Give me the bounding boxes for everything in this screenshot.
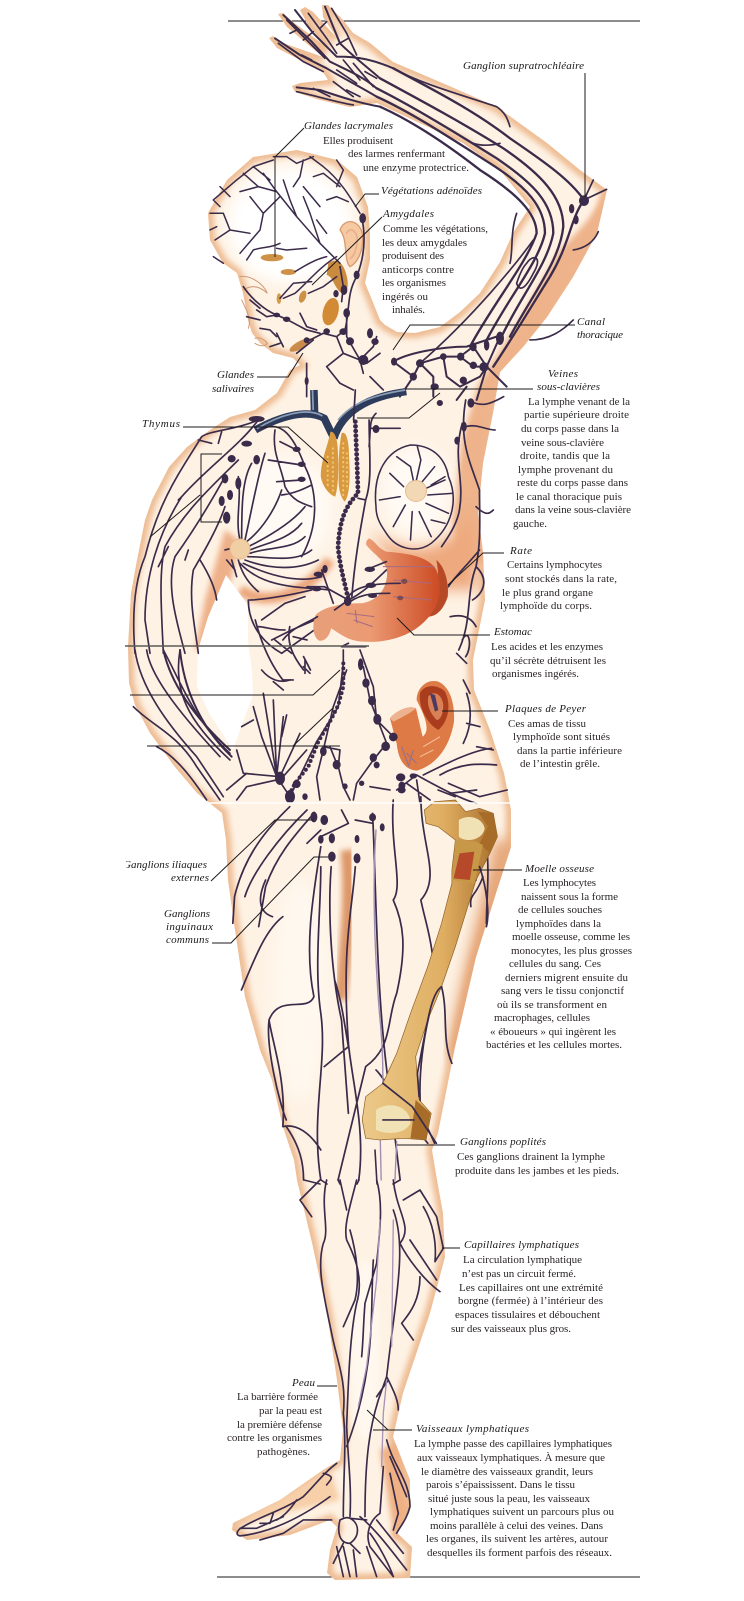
vessels: knee connectors: [304, 1150, 400, 1184]
label: Amygdales: produisent des: [382, 250, 444, 262]
label: Rate: le plus grand organe: [502, 587, 593, 599]
label: Estomac: Estomac: [493, 626, 532, 638]
label: Ganglions poplites: Ces ganglions drainent la lymphe: [457, 1151, 605, 1163]
label: Plaques de Peyer: Ces amas de tissu: [508, 718, 586, 730]
unlabelled leader lines left: [125, 454, 369, 746]
label: Vaisseaux lymphatiques: les organes, ils suivent les artères, autour: [426, 1533, 608, 1545]
label: Plaques de Peyer: lymphoïde sont situés: [513, 731, 610, 743]
label: Veines sous-clavieres: veine sous-clavière: [521, 437, 604, 449]
label: Amygdales: inhalés.: [392, 304, 425, 316]
label: Glandes lacrymales: des larmes renfermant: [348, 148, 445, 160]
label: Canal thoracique: [393, 316, 623, 350]
label: Veines sous-clavieres: le canal thoracique puis: [516, 491, 622, 503]
label: Amygdales: anticorps contre: [382, 264, 454, 276]
label: Vaisseaux lymphatiques: situé juste sous la peau, les vaisseaux: [428, 1493, 590, 1505]
label: Moelle osseuse: [473, 863, 632, 1051]
label: Veines sous-clavieres: partie supérieure droite: [524, 409, 629, 421]
subclavian veins: [255, 390, 406, 438]
label: Vaisseaux lymphatiques: Vaisseaux lymphatiques: [416, 1423, 529, 1435]
bottom rule: [217, 1576, 640, 1578]
label: Estomac: [397, 618, 606, 680]
label: Moelle osseuse: sang vers le tissu conjonctif: [501, 985, 624, 997]
label: Ganglions inguinaux communs: Ganglions: [164, 908, 210, 920]
label: Vaisseaux lymphatiques: aux vaisseaux lymphatiques. À mesure que: [417, 1452, 605, 1464]
label: Capillaires lymphatiques: sur des vaisseaux plus gros.: [451, 1323, 571, 1335]
gland: amygdala: [320, 296, 342, 327]
label: Ganglions iliaques externes: externes: [171, 872, 209, 884]
label: Plaques de Peyer: dans la partie inférieure: [517, 745, 622, 757]
label: Moelle osseuse: macrophages, cellules: [494, 1012, 590, 1024]
nipple right: [406, 480, 426, 502]
label: Estomac: qu’il sécrète détruisent les: [490, 655, 606, 667]
label: Moelle osseuse: Moelle osseuse: [524, 863, 594, 875]
label: Amygdales: Amygdales: [382, 208, 434, 220]
label: Thymus: [142, 418, 328, 463]
label: Thymus: Thymus: [142, 418, 180, 430]
gland: parotid: [327, 261, 348, 294]
gland: small cheek: [277, 293, 281, 304]
label: Capillaires lymphatiques: La circulation lymphatique: [463, 1254, 582, 1266]
vessels: axillary network: [391, 195, 589, 400]
label: Peau: [227, 1377, 337, 1458]
label: Estomac: Les acides et les enzymes: [491, 641, 603, 653]
femur: [362, 800, 497, 1143]
label: Vaisseaux lymphatiques: [367, 1410, 614, 1559]
label: Glandes lacrymales: une enzyme protectrice.: [363, 162, 469, 174]
vessels: head and neck: [210, 157, 383, 397]
label: Canal thoracique: Canal: [577, 316, 605, 328]
label: Peau: La barrière formée: [237, 1391, 318, 1403]
stomach: [313, 538, 440, 642]
gland: cheek: [297, 290, 308, 304]
face features: [240, 222, 363, 346]
nipple left: [230, 539, 250, 559]
label: Ganglion supratrochleaire: [463, 60, 585, 197]
label: Rate: Rate: [509, 545, 532, 557]
label: Capillaires lymphatiques: [442, 1239, 603, 1335]
label: Glandes lacrymales: [275, 120, 469, 257]
label: Capillaires lymphatiques: borgne (fermée) à l’intérieur des: [458, 1295, 603, 1307]
label: Capillaires lymphatiques: Capillaires lymphatiques: [464, 1239, 579, 1251]
label: Veines sous-clavieres: Veines: [548, 368, 578, 380]
label: Vaisseaux lymphatiques: parois s’épaississent. Dans le tissu: [426, 1479, 576, 1491]
label: Veines sous-clavieres: dans la veine sous-clavière: [515, 504, 631, 516]
label: Veines sous-clavieres: [357, 368, 631, 530]
label: Estomac: organismes ingérés.: [492, 668, 579, 680]
label: Glandes salivaires: [212, 353, 303, 395]
label: Veines sous-clavieres: lymphe provenant du: [518, 464, 614, 476]
label: Moelle osseuse: où ils se transforment en: [497, 999, 608, 1011]
label: Vegetations adenoides: Végétations adénoïdes: [381, 185, 482, 197]
label: Ganglions inguinaux communs: communs: [166, 934, 209, 946]
label: Plaques de Peyer: de l’intestin grêle.: [520, 758, 600, 770]
label: Veines sous-clavieres: La lymphe venant de la: [528, 396, 630, 408]
label: Amygdales: les organismes: [382, 277, 446, 289]
label: Glandes salivaires: Glandes: [217, 369, 254, 381]
label: Moelle osseuse: lymphoïdes dans la: [516, 918, 601, 930]
label: Vaisseaux lymphatiques: lymphatiques suivent un parcours plus ou: [430, 1506, 614, 1518]
label: Amygdales: ingérés ou: [382, 291, 428, 303]
label: Moelle osseuse: moelle osseuse, comme les: [512, 931, 630, 943]
label: Moelle osseuse: « éboueurs » qui ingèrent les: [490, 1026, 616, 1038]
gland: lacrymal lower: [281, 269, 296, 275]
vessels: lower legs: [237, 1180, 443, 1577]
label: Ganglions poplites: produite dans les jambes et les pieds.: [455, 1165, 619, 1177]
label: Moelle osseuse: monocytes, les plus grosses: [511, 945, 632, 957]
label: Veines sous-clavieres: droite, tandis que la: [520, 450, 610, 462]
vessels: arm and hand: [275, 7, 607, 367]
label: Glandes lacrymales: Elles produisent: [323, 135, 393, 147]
label: Ganglions inguinaux communs: [164, 857, 328, 946]
label: Vaisseaux lymphatiques: moins parallèle à celui des veines. Dans: [430, 1520, 603, 1532]
label: Moelle osseuse: Les lymphocytes: [523, 877, 596, 889]
label: Peau: par la peau est: [259, 1405, 322, 1417]
head glands: [261, 254, 348, 354]
label: Vaisseaux lymphatiques: le diamètre des vaisseaux grandit, leurs: [421, 1466, 593, 1478]
label: Ganglions poplites: Ganglions poplités: [460, 1136, 546, 1148]
vessels: thighs: [233, 780, 507, 1180]
label: Vaisseaux lymphatiques: La lymphe passe des capillaires lymphatiques: [414, 1438, 612, 1450]
label: Veines sous-clavieres: gauche.: [513, 518, 547, 530]
thoracic duct chain: [338, 390, 400, 600]
label: Glandes lacrymales: Glandes lacrymales: [304, 120, 393, 132]
label: Capillaires lymphatiques: Les capillaires ont une extrémité: [459, 1282, 603, 1294]
white gap between arm and torso: [197, 575, 253, 750]
vessels: around stomach: [255, 562, 400, 680]
label: Ganglions inguinaux communs: inguinaux: [166, 921, 213, 933]
vessels: left arm and chest: [134, 416, 333, 653]
label: Moelle osseuse: bactéries et les cellules mortes.: [486, 1039, 622, 1051]
vessels: lower abdomen: [133, 650, 497, 803]
label: Veines sous-clavieres: du corps passe dans la: [521, 423, 619, 435]
label: Moelle osseuse: cellules du sang. Ces: [509, 958, 601, 970]
seam line: [205, 802, 515, 804]
top rule: [228, 20, 640, 22]
body silhouette: [128, 5, 610, 1580]
gland: lacrymal upper: [261, 254, 283, 261]
label: Capillaires lymphatiques: n’est pas un circuit fermé.: [462, 1268, 576, 1280]
label: Peau: Peau: [291, 1377, 316, 1389]
label: Moelle osseuse: de cellules souches: [518, 904, 602, 916]
label: Ganglions poplites: [397, 1136, 619, 1177]
label: Peau: la première défense: [237, 1419, 322, 1431]
label: Moelle osseuse: naissent sous la forme: [521, 891, 618, 903]
intestine: [390, 681, 454, 771]
label: Vaisseaux lymphatiques: desquelles ils forment parfois des réseaux.: [427, 1547, 612, 1559]
label: Capillaires lymphatiques: espaces tissulaires et débouchent: [455, 1309, 600, 1321]
label: Moelle osseuse: derniers migrent ensuite du: [505, 972, 628, 984]
spleen: [426, 560, 448, 617]
label: Amygdales: [312, 208, 488, 316]
label: Rate: Certains lymphocytes: [507, 559, 602, 571]
label: Amygdales: les deux amygdales: [382, 237, 467, 249]
gland: salivary: [288, 336, 313, 354]
label: Plaques de Peyer: [442, 703, 622, 770]
label: Ganglion supratrochleaire: Ganglion supratrochléaire: [463, 60, 584, 72]
label: Veines sous-clavieres: sous-clavières: [537, 381, 600, 393]
label: Glandes salivaires: salivaires: [212, 383, 254, 395]
label: Rate: [448, 545, 617, 612]
thymus: [321, 432, 350, 502]
label: Ganglions iliaques externes: Ganglions iliaques: [123, 859, 207, 871]
label: Rate: sont stockés dans la rate,: [505, 573, 617, 585]
label: Vegetations adenoides: [355, 185, 482, 207]
vessels: right breast: [373, 383, 504, 657]
label: Plaques de Peyer: Plaques de Peyer: [504, 703, 587, 715]
label: Peau: pathogènes.: [257, 1446, 310, 1458]
label: Amygdales: Comme les végétations,: [383, 223, 488, 235]
label: Canal thoracique: thoracique: [577, 329, 623, 341]
label: Veines sous-clavieres: reste du corps passe dans: [517, 477, 628, 489]
label: Ganglions iliaques externes: [123, 820, 313, 884]
label: Rate: lymphoïde du corps.: [500, 600, 592, 612]
label: Peau: contre les organismes: [227, 1432, 322, 1444]
